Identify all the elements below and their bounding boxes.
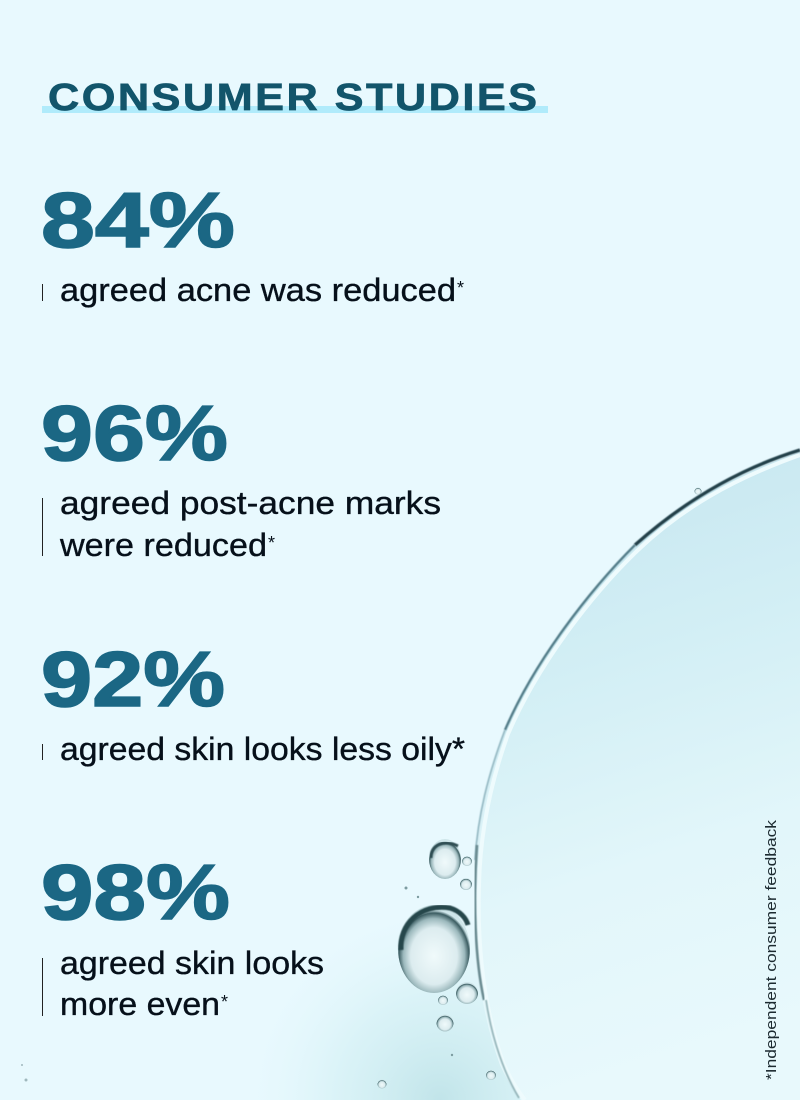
title with underline: CONSUMER STUDIES (48, 75, 537, 118)
stat: 96%: agreed post-acne marks (60, 485, 441, 521)
water droplets (21, 488, 702, 1088)
water dish (475, 450, 800, 1100)
stat: 98% (41, 848, 324, 1022)
stat: 92%: agreed skin looks less oily* (60, 731, 465, 767)
stat: 92%: 92% (41, 635, 225, 723)
stat: 84%: 84% (41, 176, 235, 264)
footnote: *Independent consumer feedback (763, 819, 780, 1080)
stat: 96%: were reduced (59, 527, 267, 563)
stat: 98%: agreed skin looks (60, 945, 324, 981)
stat: 98%: * (221, 992, 228, 1012)
stat: 96% (41, 389, 441, 563)
stat: 84%: * (457, 278, 464, 298)
stat: 96%: 96% (41, 389, 228, 477)
stat: 98%: more even (60, 986, 220, 1022)
shaded water near droplets (250, 910, 530, 1100)
stat: 92% (41, 635, 465, 767)
stat: 84% (41, 176, 464, 308)
stat: 96%: * (268, 533, 275, 553)
stat: 84%: agreed acne was reduced (60, 272, 456, 308)
stat: 98%: 98% (41, 848, 230, 936)
